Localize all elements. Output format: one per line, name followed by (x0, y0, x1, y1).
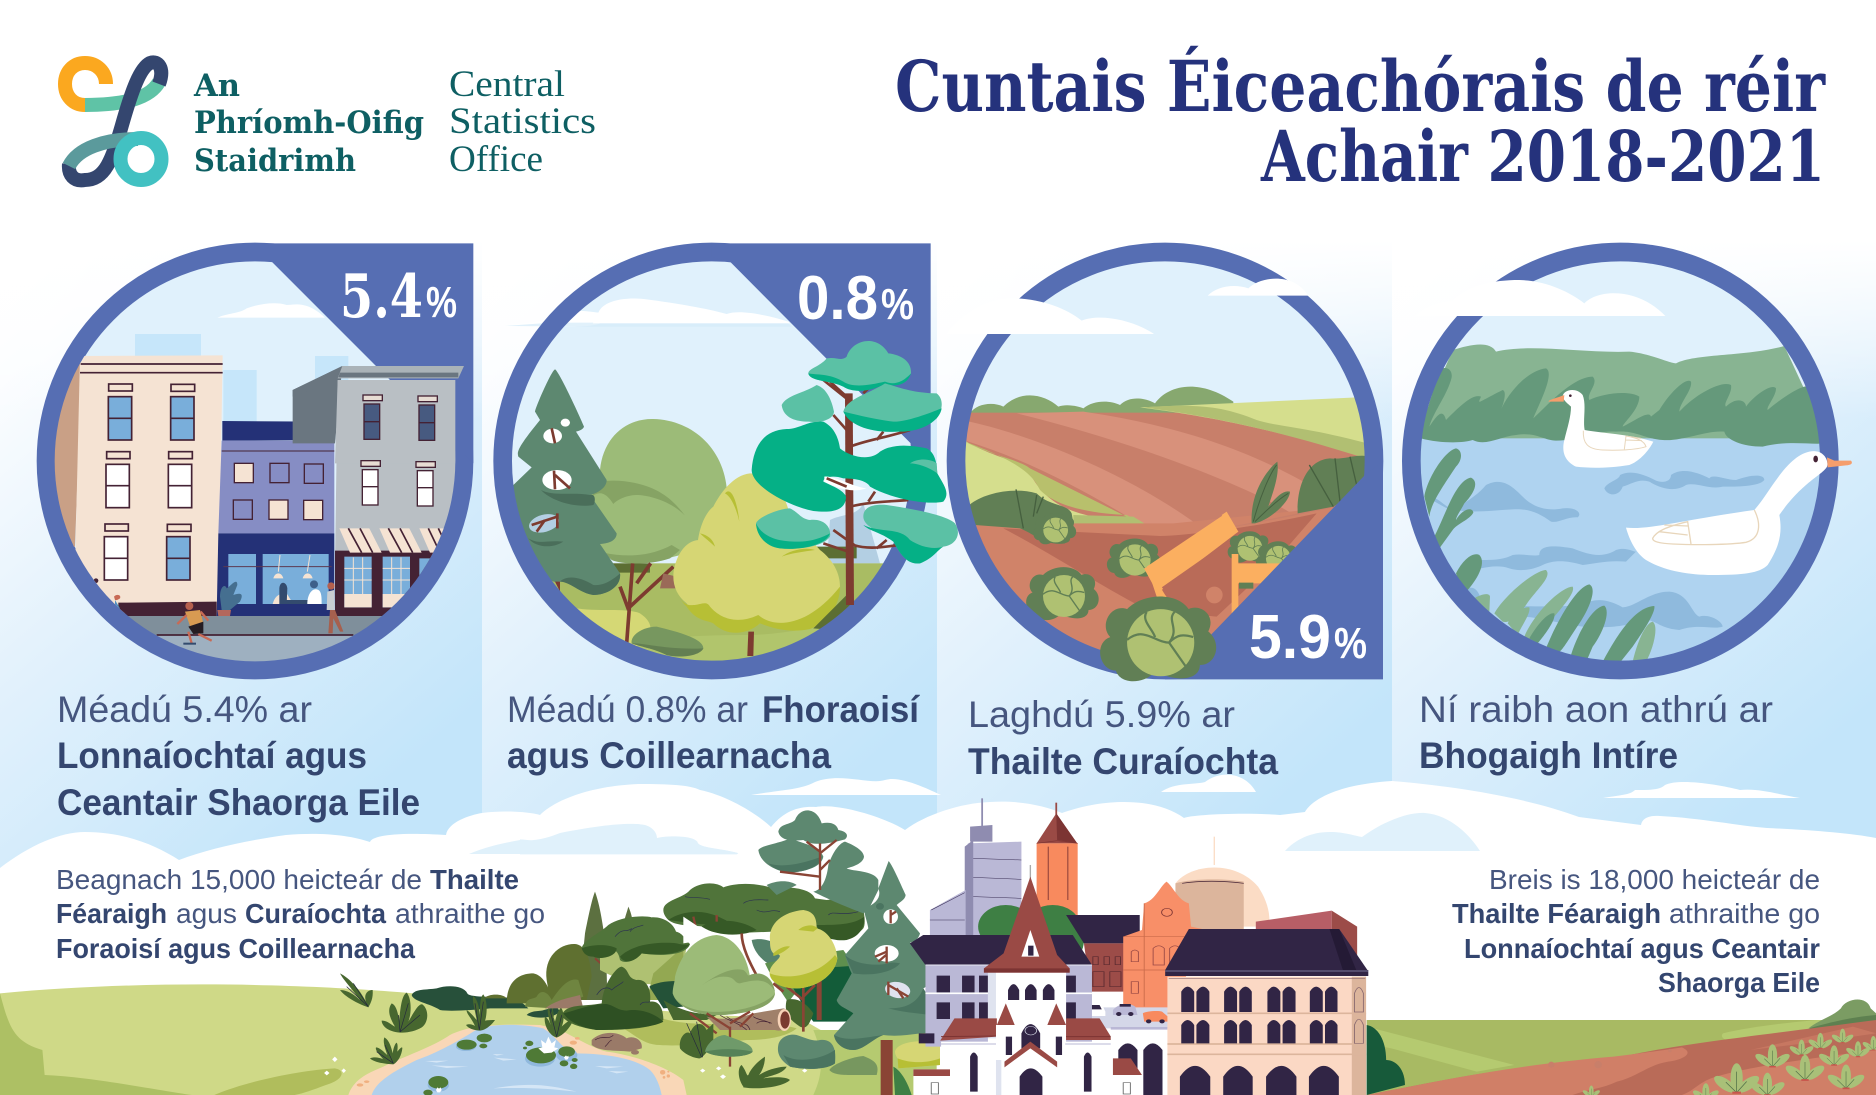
left hall (910, 935, 1092, 1047)
percentage 5.9: 5.9 (1249, 603, 1331, 672)
caption: artificial surfaces: Ceantair Shaorga Eile (57, 782, 420, 823)
caption: artificial surfaces: Méadú 5.4% ar (57, 689, 312, 730)
percentage 5.9: % (1334, 619, 1367, 668)
panel: artificial surfaces circle (33, 243, 473, 677)
caption: artificial surfaces (57, 689, 420, 823)
left field (0, 984, 700, 1095)
logo symbol (65, 62, 162, 180)
note: forest conversion: Foraoisí agus Coillearnacha (56, 933, 416, 964)
page background panels (0, 195, 1876, 870)
note: forest conversion: Beagnach 15,000 heicteár de (56, 864, 422, 895)
people on street (177, 582, 343, 645)
central illustration: pond and marsh plants (340, 973, 687, 1095)
ring (1411, 252, 1829, 670)
panel: agricultural land circle (947, 252, 1383, 681)
logo English name: Statistics (449, 101, 596, 142)
percentage 5.4: % (426, 278, 457, 327)
grey building upper storeys (293, 366, 464, 467)
illustration: lake with ducks (1411, 252, 1852, 672)
caption: agricultural land: Thailte Curaíochta (968, 741, 1278, 782)
illustration: crop field (947, 252, 1383, 681)
caption: wetlands: Bhogaigh Intíre (1419, 735, 1678, 776)
panel: inland wetlands circle (1411, 252, 1852, 672)
logo English name (449, 64, 596, 180)
vegetables and crates (1026, 512, 1299, 620)
title (895, 45, 1826, 198)
pine tree overlapping ring (752, 341, 958, 605)
logo Irish name: Staidrimh (194, 143, 356, 179)
note: artificial surfaces conversion: Breis is 18,000 heicteár de (1489, 864, 1820, 895)
caption: forests (507, 689, 921, 776)
note: artificial surfaces conversion: Lonnaíochtaí agus Ceantair (1464, 933, 1820, 964)
illustration: town street (33, 243, 473, 677)
ring and corner (503, 243, 931, 670)
percentage 0.8: 0.8 (797, 264, 878, 333)
cloud (505, 298, 790, 327)
caption: forests: Fhoraoisí (762, 689, 921, 730)
logo English name: Office (449, 139, 543, 180)
note: forest conversion: athraithe go (395, 898, 545, 929)
skyscraper (930, 798, 1021, 937)
caption: forests: Méadú 0.8% ar (507, 689, 748, 730)
percentage 5.4: 5.4 (340, 262, 423, 332)
small wing and arches (913, 1028, 1167, 1095)
central meadow under the trees (560, 1013, 933, 1095)
pale inner clouds (469, 813, 1480, 854)
percentage 0.8: % (881, 280, 914, 329)
clouds (947, 279, 1308, 334)
large duck (1626, 451, 1852, 575)
caption: agricultural land: Laghdú 5.9% ar (968, 694, 1235, 735)
small clouds on panels (751, 775, 1800, 798)
road and cars (1091, 1004, 1169, 1028)
note: artificial surfaces conversion: Shaorga Eile (1658, 967, 1820, 998)
note: artificial surfaces conversion: athraithe go (1669, 898, 1820, 929)
note: artificial surfaces conversion (1452, 864, 1820, 998)
right field and ploughed land (1367, 1000, 1876, 1095)
illustration: trees (497, 243, 958, 670)
orange tower (1037, 803, 1078, 920)
orange gabled building (1123, 882, 1202, 1013)
note: forest conversion: Curaíochta (245, 898, 387, 929)
ring and corner (956, 252, 1383, 679)
caption: agricultural land (968, 694, 1278, 782)
note: forest conversion: Thailte (430, 864, 519, 895)
note: forest conversion: agus (176, 898, 237, 929)
caption: wetlands: Ní raibh aon athrú ar (1419, 689, 1773, 730)
cloud (1416, 280, 1665, 316)
logo English name: Central (449, 64, 565, 105)
panel: forests circle (497, 243, 958, 670)
logo: Central Statistics Office (65, 62, 596, 180)
logo Irish name: Phríomh-Oifig (194, 105, 424, 141)
marsh plants (340, 973, 573, 1064)
white cloud band (0, 781, 1876, 1095)
small duck (1549, 390, 1653, 468)
central illustration: tree cluster (507, 810, 940, 1095)
big cabbage (1100, 596, 1216, 681)
caption: wetlands (1419, 689, 1773, 776)
note: forest conversion (56, 864, 545, 964)
logo Irish name: An (193, 68, 240, 104)
logo Irish name (193, 68, 424, 179)
church (940, 865, 1113, 1095)
dome (1175, 837, 1269, 930)
note: artificial surfaces conversion: Thailte Féaraigh (1452, 898, 1661, 929)
note: forest conversion: Féaraigh (56, 898, 167, 929)
caption: artificial surfaces: Lonnaíochtaí agus (57, 735, 367, 776)
caption: forests: agus Coillearnacha (507, 735, 831, 776)
central illustration: town buildings (910, 798, 1368, 1095)
large civic building (1165, 911, 1368, 1095)
